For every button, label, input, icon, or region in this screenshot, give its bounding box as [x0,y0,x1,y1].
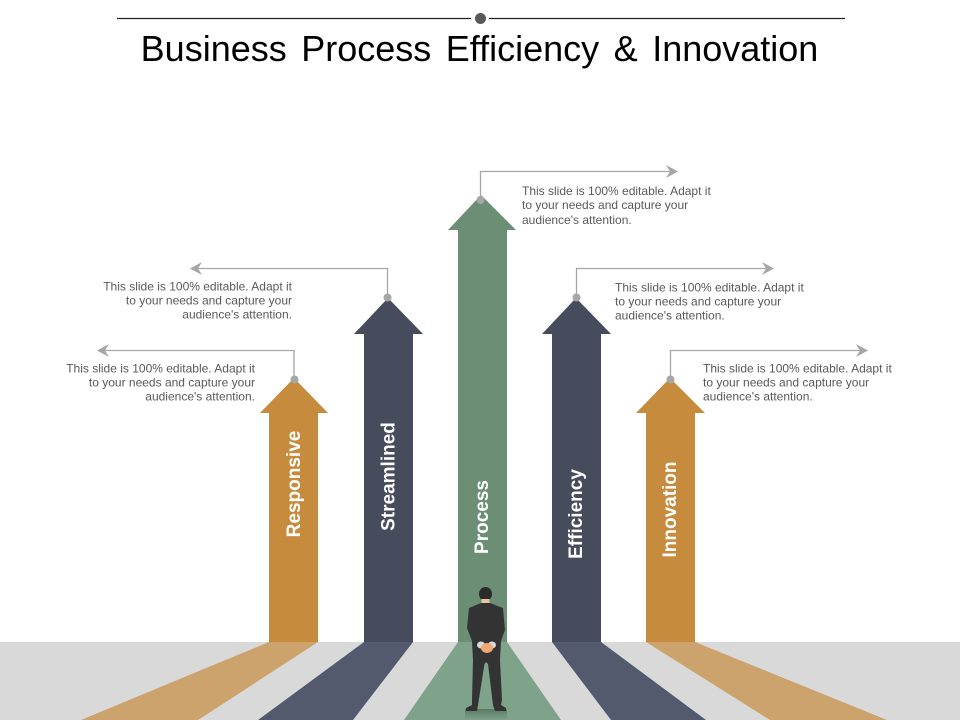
arrow: Efficiency: Efficiency [566,469,587,559]
callout: Innovation [666,344,892,404]
title ornament [117,13,845,24]
callout: Responsive: This slide is 100% editable. Adapt it [66,362,256,376]
callout: Efficiency: audience's attention. [615,309,725,323]
callout: Efficiency [572,262,804,323]
arrow: Efficiency [542,298,611,642]
floor shadows [81,642,887,720]
arrow: Innovation: Innovation [660,461,681,558]
arrow: Process: Process [472,480,493,554]
callout: Streamlined: to your needs and capture your [126,294,292,308]
title: Business Process Efficiency & Innovation [141,28,818,69]
callout: Efficiency: to your needs and capture your [615,295,781,309]
arrow: Streamlined [354,298,423,642]
callout: Streamlined: This slide is 100% editable. Adapt it [103,280,293,294]
callout: Process: audience's attention. [522,213,632,227]
callout: Efficiency: This slide is 100% editable. Adapt it [615,281,804,295]
arrow: Streamlined: Streamlined [378,422,399,531]
callout: Process: to your needs and capture your [522,198,688,212]
callout: Innovation: This slide is 100% editable. Adapt it [703,362,892,376]
arrow: Responsive [260,378,328,642]
callout: Process: This slide is 100% editable. Adapt it [522,184,711,198]
callout: Innovation: to your needs and capture your [703,376,869,390]
arrow: Process [448,195,516,642]
callout: Process [476,165,711,227]
callout: Responsive: to your needs and capture your [89,376,255,390]
arrow: Responsive: Responsive [284,431,305,537]
icon: businessman from behind [465,587,507,720]
callout: Innovation: audience's attention. [703,390,813,404]
callout: Responsive [66,344,298,404]
arrow: Innovation [636,378,705,642]
callout: Streamlined [103,262,392,322]
ground [0,642,960,720]
callout: Streamlined: audience's attention. [182,308,292,322]
callout: Responsive: audience's attention. [145,390,255,404]
